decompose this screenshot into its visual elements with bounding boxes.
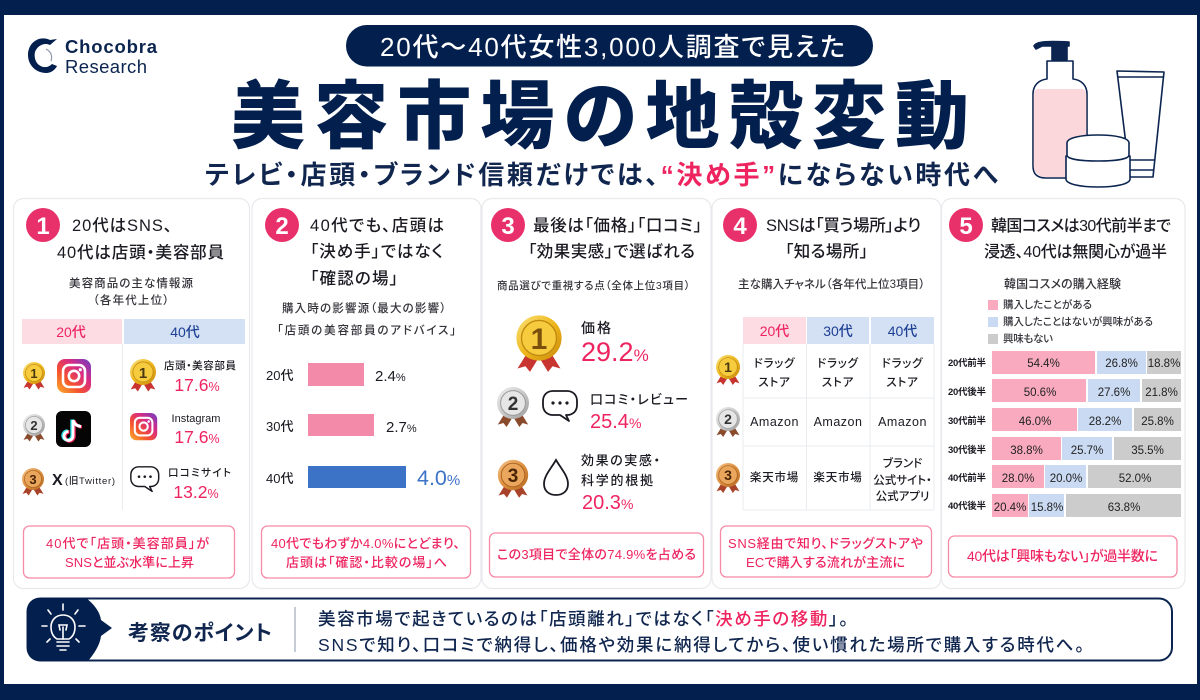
stacked bar chart: 46.0% bbox=[1019, 416, 1051, 428]
stacked bar chart: 18.8% bbox=[1148, 358, 1180, 370]
badge 4 bbox=[723, 208, 757, 242]
icon: light bulb bbox=[27, 598, 112, 661]
stacked bar chart: 21.8% bbox=[1145, 387, 1178, 399]
callout 4: SNS経由で知り、ドラッグストアや bbox=[728, 536, 923, 551]
rank 1 price: 29.2% bbox=[581, 337, 649, 367]
subheading 1 bbox=[69, 276, 194, 307]
bar chart: 20代 bbox=[266, 368, 293, 383]
stacked bar chart: 28.2% bbox=[1089, 416, 1121, 428]
callout 4 bbox=[720, 526, 932, 577]
heading 1: 40代は店頭・美容部員 bbox=[57, 243, 224, 262]
channel table: ドラッグ bbox=[882, 356, 924, 370]
20s rank 3 X bbox=[22, 468, 115, 496]
stacked bar chart: 30代前半 bbox=[948, 415, 986, 427]
callout 2: 店頭は「確認・比較の場」へ bbox=[286, 555, 447, 570]
callout 1: 40代で「店頭・美容部員」が bbox=[46, 536, 209, 551]
callout 4: ECで購入する流れが主流に bbox=[746, 555, 905, 570]
callout 3: この3項目で全体の74.9%を占める bbox=[497, 547, 696, 562]
legend bbox=[988, 298, 1153, 345]
channel table: ストア bbox=[886, 376, 919, 389]
heading 4: SNSは「買う場所」より bbox=[766, 216, 921, 235]
table header 40s: 40代 bbox=[170, 324, 200, 340]
channel table: Amazon bbox=[878, 415, 927, 429]
20s rank 1 Instagram: 1 bbox=[30, 366, 38, 381]
pill heading bbox=[346, 25, 873, 66]
callout 1 bbox=[24, 526, 234, 578]
40s rank 2 Instagram bbox=[130, 413, 220, 447]
legend: 購入したことがある bbox=[1003, 298, 1092, 311]
legend: 購入したことはないが興味がある bbox=[1003, 315, 1153, 328]
40s rank 3 review sites: 13.2% bbox=[173, 482, 219, 502]
heading 3: 「効果実感」で選ばれる bbox=[528, 242, 695, 261]
logo: Chocobra Research: Chocobra bbox=[65, 36, 158, 57]
pill heading: 20代～40代女性3,000人調査で見えた bbox=[380, 32, 845, 62]
panel 5: Korean cosmetics bbox=[942, 198, 1185, 588]
insight text: SNSで知り、口コミで納得し、価格や効果に納得してから、使い慣れた場所で購入する時代へ。 bbox=[318, 635, 1084, 655]
heading 2: 「決め手」ではなく bbox=[310, 242, 443, 261]
callout 1: SNSと並ぶ水準に上昇 bbox=[65, 555, 194, 570]
heading 5: 浸透、40代は無関心が過半 bbox=[984, 242, 1167, 261]
stacked bar chart: 40代後半 bbox=[948, 500, 986, 512]
stacked bar chart bbox=[948, 351, 1181, 517]
badge 5: 5 bbox=[959, 213, 973, 240]
subheading 2: 購入時の影響源（最大の影響） bbox=[282, 301, 446, 315]
bar chart: 2.7% bbox=[386, 419, 417, 436]
bar chart bbox=[266, 363, 460, 490]
insight text bbox=[318, 609, 1084, 655]
channel table: 20代 bbox=[760, 323, 789, 339]
stacked bar chart: 15.8% bbox=[1031, 502, 1063, 514]
callout 2: 40代でもわずか4.0%にとどまり、 bbox=[271, 536, 460, 551]
channel table: 30代 bbox=[823, 323, 853, 339]
badge 1: 1 bbox=[36, 213, 50, 240]
channel table: Amazon bbox=[750, 415, 799, 429]
channel table: 公式サイト・ bbox=[873, 473, 932, 487]
bar chart: 40代 bbox=[266, 471, 293, 486]
badge 1 bbox=[26, 208, 60, 242]
rank 1 price: 価格 bbox=[581, 320, 611, 336]
illustration: cosmetic bottles bbox=[1033, 41, 1164, 187]
channel table bbox=[743, 317, 934, 510]
rank medals: 2 bbox=[724, 411, 732, 427]
heading 5 bbox=[984, 217, 1171, 261]
channel table: 楽天市場 bbox=[750, 470, 799, 484]
panel 4: purchase channels bbox=[712, 198, 941, 588]
40s rank 1 store staff: 店頭・美容部員 bbox=[164, 359, 236, 372]
20s rank 3 X: X bbox=[52, 472, 63, 489]
title: 美容市場の地殻変動 bbox=[231, 75, 969, 158]
badge 2: 2 bbox=[275, 213, 289, 240]
subheading 2: 「店頭の美容部員のアドバイス」 bbox=[277, 323, 456, 337]
channel table: ストア bbox=[822, 376, 854, 389]
20s rank 3 X: (旧Twitter) bbox=[65, 475, 115, 487]
insight label: 考察のポイント bbox=[128, 622, 272, 645]
logo: Chocobra Research bbox=[28, 36, 158, 77]
table header 40s bbox=[124, 319, 245, 344]
badge 3: 3 bbox=[501, 213, 515, 240]
bar chart: 4.0% bbox=[417, 466, 460, 490]
rank 2 reviews bbox=[497, 387, 688, 433]
subheading 1: （各年代上位） bbox=[93, 293, 169, 307]
stacked bar chart: 20代前半 bbox=[948, 357, 986, 369]
stacked bar chart: 25.7% bbox=[1071, 445, 1103, 457]
bar chart: 30代 bbox=[266, 419, 293, 434]
rank medals: 1 bbox=[724, 359, 732, 375]
40s rank 1 store staff: 17.6% bbox=[174, 375, 220, 395]
heading 4: 「知る場所」 bbox=[785, 242, 868, 261]
stacked bar chart: 20.4% bbox=[994, 502, 1026, 514]
subheading 4: 主な購入チャネル（各年代上位3項目） bbox=[738, 277, 925, 291]
heading 2: 40代でも、店頭は bbox=[310, 216, 444, 235]
20s rank 2 TikTok: 2 bbox=[30, 418, 38, 433]
stacked bar chart: 35.5% bbox=[1131, 445, 1164, 457]
20s rank 1 Instagram bbox=[23, 359, 91, 393]
panel 2: purchase influence bbox=[252, 198, 481, 588]
stacked bar chart: 27.6% bbox=[1098, 387, 1130, 399]
subheading 2 bbox=[277, 301, 456, 337]
rank 2 reviews: 2 bbox=[508, 394, 518, 415]
stacked bar chart: 54.4% bbox=[1027, 358, 1060, 370]
rank 3 efficacy: 科学的根拠 bbox=[581, 473, 653, 488]
stacked bar chart: 25.8% bbox=[1141, 416, 1174, 428]
40s rank 3 review sites bbox=[131, 467, 231, 502]
rank 2 reviews: 口コミ・レビュー bbox=[590, 392, 688, 407]
channel table: ストア bbox=[758, 376, 791, 389]
heading 1: 20代はSNS、 bbox=[72, 216, 172, 235]
20s rank 2 TikTok bbox=[23, 411, 91, 447]
legend: 興味もない bbox=[1003, 332, 1053, 345]
bar chart: 2.4% bbox=[375, 368, 406, 385]
logo: Chocobra Research: Research bbox=[65, 56, 147, 77]
channel table: 40代 bbox=[888, 323, 917, 339]
stacked bar chart: 20代後半 bbox=[948, 386, 986, 398]
channel table: 公式アプリ bbox=[876, 489, 929, 503]
stacked bar chart: 26.8% bbox=[1105, 358, 1138, 370]
panel 3: selection criteria bbox=[482, 198, 711, 588]
rank 1 price: 1 bbox=[531, 323, 547, 356]
heading 3: 最後は「価格」「口コミ」 bbox=[533, 216, 702, 235]
heading 2: 「確認の場」 bbox=[310, 269, 398, 288]
channel table: 楽天市場 bbox=[813, 470, 863, 484]
channel table: Amazon bbox=[814, 415, 862, 429]
40s rank 2 Instagram: Instagram bbox=[172, 413, 220, 425]
heading 1 bbox=[57, 216, 224, 262]
stacked bar chart: 40代前半 bbox=[948, 472, 986, 484]
rank 3 efficacy: 20.3% bbox=[582, 492, 633, 514]
callout 5: 40代は「興味もない」が過半数に bbox=[967, 548, 1158, 564]
channel table: ブランド bbox=[883, 456, 923, 470]
callout 2 bbox=[262, 526, 470, 578]
subheading 3: 商品選びで重視する点（全体上位3項目） bbox=[497, 279, 690, 292]
rank 3 efficacy: 効果の実感・ bbox=[581, 453, 660, 468]
rank medals: 3 bbox=[724, 467, 732, 483]
stacked bar chart: 63.8% bbox=[1108, 502, 1140, 514]
stacked bar chart: 50.6% bbox=[1024, 387, 1056, 399]
20s rank 3 X: 3 bbox=[29, 472, 37, 487]
heading 5: 韓国コスメは30代前半まで bbox=[991, 217, 1171, 235]
channel table: ドラッグ bbox=[817, 356, 859, 370]
heading 3 bbox=[528, 216, 702, 261]
subtitle: テレビ・店頭・ブランド信頼だけでは、“決め手”にならない時代へ bbox=[205, 160, 999, 190]
heading 2 bbox=[310, 216, 444, 288]
badge 2 bbox=[265, 208, 299, 242]
stacked bar chart: 28.0% bbox=[1002, 473, 1034, 485]
insight text: 美容市場で起きているのは「店頭離れ」ではなく「決め手の移動」。 bbox=[318, 609, 848, 629]
badge 4: 4 bbox=[733, 213, 747, 240]
40s rank 3 review sites: 口コミサイト bbox=[168, 467, 231, 479]
rank 1 price bbox=[516, 315, 649, 372]
callout 5 bbox=[948, 536, 1177, 577]
insight bar bbox=[27, 598, 1172, 661]
rank medals bbox=[716, 355, 740, 493]
badge 5 bbox=[949, 208, 983, 242]
subheading 1: 美容商品の主な情報源 bbox=[69, 276, 194, 290]
heading 4 bbox=[766, 216, 921, 261]
subheading 5: 韓国コスメの購入経験 bbox=[1004, 276, 1121, 291]
40s rank 1 store staff bbox=[130, 359, 236, 395]
rank 3 efficacy bbox=[498, 453, 660, 514]
40s rank 1 store staff: 1 bbox=[139, 365, 147, 382]
callout 3 bbox=[490, 533, 704, 577]
stacked bar chart: 38.8% bbox=[1010, 445, 1043, 457]
stacked bar chart: 52.0% bbox=[1119, 473, 1151, 485]
stacked bar chart: 30代後半 bbox=[948, 444, 986, 456]
table header 20s bbox=[22, 319, 122, 344]
table header 20s: 20代 bbox=[56, 324, 86, 340]
channel table: ドラッグ bbox=[754, 356, 796, 370]
panel 1: information sources bbox=[14, 198, 250, 588]
stacked bar chart: 20.0% bbox=[1050, 473, 1082, 485]
rank 2 reviews: 25.4% bbox=[590, 411, 641, 433]
badge 3 bbox=[491, 208, 525, 242]
40s rank 2 Instagram: 17.6% bbox=[174, 427, 220, 447]
rank 3 efficacy: 3 bbox=[508, 466, 518, 487]
